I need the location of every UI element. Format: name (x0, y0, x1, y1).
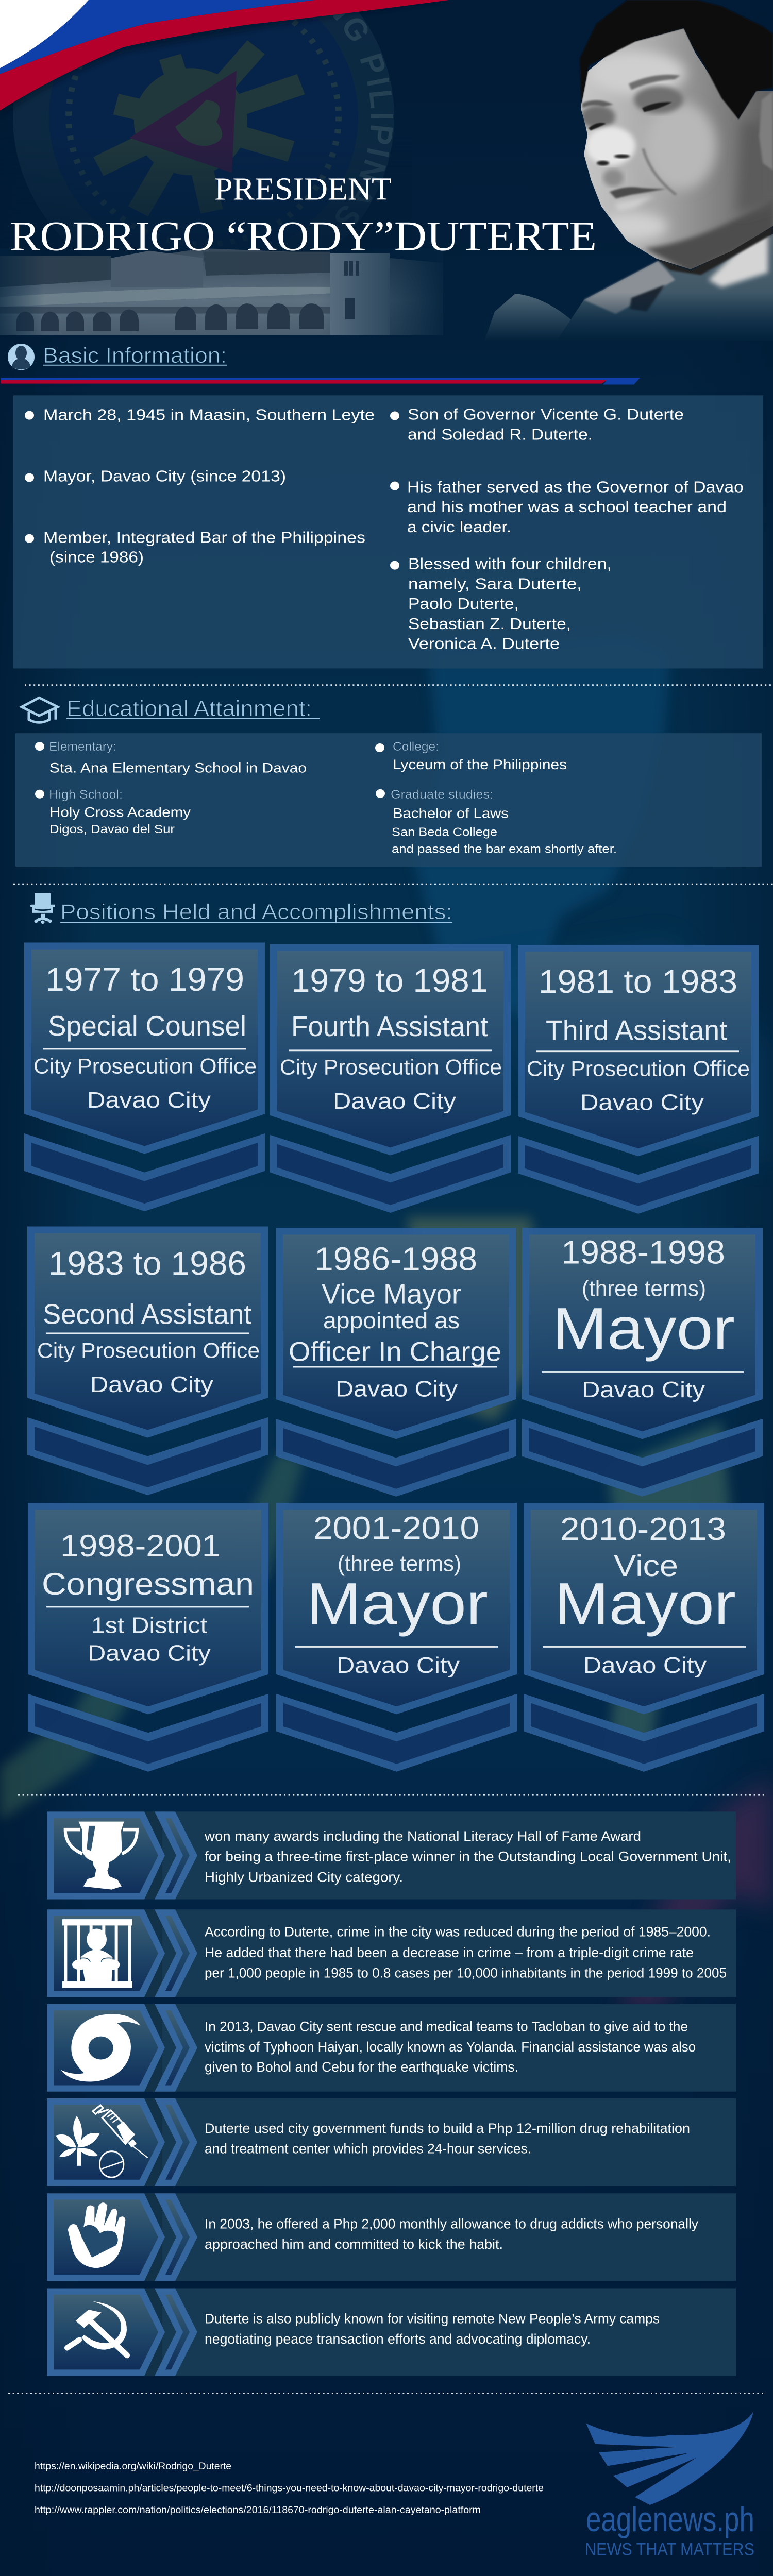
bullets: left column: March 28, 1945 in Maasin, Southern Leyte (43, 406, 375, 423)
row: peace negotiations: Duterte is also publicly known for visiting remote New People’s Army camps (205, 2311, 660, 2326)
shield: 1981 to 1983: 1981 to 1983 (539, 963, 737, 1000)
shield: 1977 to 1979: Special Counsel (48, 1010, 246, 1042)
icon: eagle wing (586, 2412, 753, 2505)
shield: 1998-2001: Congressman (42, 1567, 254, 1601)
shield: 1981 to 1983: Third Assistant (546, 1014, 727, 1046)
education: high school (35, 788, 191, 836)
shield: 1986-1988 (276, 1228, 516, 1497)
row: drug addict allowance: approached him and committed to kick the habit. (205, 2236, 503, 2252)
shield: 2010-2013: Davao City (583, 1653, 707, 1678)
shield: 1986-1988: 1986-1988 (314, 1241, 477, 1278)
bullets: left column: Mayor, Davao City (since 2013) (43, 467, 286, 485)
portrait: face (577, 24, 773, 273)
watermark: presidential seal (13, 12, 394, 233)
icon: office chair (30, 893, 55, 924)
portrait: mouth (610, 187, 666, 211)
shield: 1983 to 1986: Second Assistant (43, 1298, 251, 1330)
heading: Positions Held and Accomplishments: Positions Held and Accomplishments: (60, 900, 452, 924)
row: drug rehabilitation: and treatment center which provides 24-hour services. (205, 2141, 531, 2157)
heading: Basic Information: Basic Information: (43, 344, 227, 368)
flag swoosh (0, 0, 449, 117)
shield: 1979 to 1981: 1979 to 1981 (291, 962, 488, 999)
row: crime reduction: According to Duterte, crime in the city was reduced during the period of 1985–2000. (205, 1924, 711, 1939)
education: graduate studies: Graduate studies: (391, 788, 493, 802)
icon: graduation cap (22, 698, 58, 722)
icon: prisoner behind bars (62, 1919, 132, 1988)
shield: 1998-2001: 1st District (91, 1613, 208, 1638)
education: college: Lyceum of the Philippines (393, 757, 567, 772)
shield: 2001-2010: (three terms) (338, 1551, 461, 1576)
row: drug rehabilitation: Duterte used city government funds to build a Php 12-million drug rehabilitation (205, 2121, 690, 2136)
shield: 1977 to 1979: City Prosecution Office (33, 1055, 257, 1078)
bullets: right column (390, 405, 744, 652)
portrait: raised hand (484, 294, 582, 341)
shield: 1988-1998: Mayor (552, 1296, 735, 1362)
row: literacy award: won many awards including the National Literacy Hall of Fame Award (204, 1828, 641, 1844)
row: peace negotiations: negotiating peace transaction efforts and advocating diplomacy. (205, 2331, 591, 2347)
shield: 2001-2010: Davao City (337, 1653, 460, 1678)
source links: http://doonposaamin.ph/articles/people-to-meet/6-things-you-need-to-know-about-davao-city-mayor-rodrigo-duterte (35, 2483, 544, 2494)
shield: 1983 to 1986: Davao City (90, 1372, 214, 1397)
title line: PRESIDENT: PRESIDENT (214, 171, 392, 207)
bullets: right column: Blessed with four children, (408, 555, 612, 573)
bullets: right column: Son of Governor Vicente G. Duterte (408, 405, 684, 423)
logo: eaglenews.ph (585, 2412, 754, 2559)
bullets: left column: (since 1986) (49, 548, 144, 566)
education: elementary (35, 740, 307, 776)
education: college (375, 740, 567, 772)
portrait photo of Duterte (484, 0, 773, 341)
education: elementary: Sta. Ana Elementary School in Davao (49, 760, 307, 776)
heading: Positions Held and Accomplishments (30, 893, 452, 924)
row: typhoon aid: In 2013, Davao City sent rescue and medical teams to Tacloban to give aid to the (205, 2019, 688, 2034)
title line: name: RODRIGO “RODY”DUTERTE (10, 213, 597, 260)
shield: 1979 to 1981: Davao City (333, 1089, 457, 1113)
shield: 1986-1988: appointed as (323, 1308, 460, 1333)
title (10, 171, 597, 260)
panel: educational attainment (15, 733, 762, 867)
education: high school: Holy Cross Academy (49, 804, 191, 820)
panel: basic information (13, 395, 763, 668)
shield: 2010-2013: Mayor (554, 1571, 736, 1637)
portrait: nose (597, 155, 630, 165)
shield: 2010-2013: 2010-2013 (560, 1511, 726, 1547)
education: high school: High School: (49, 788, 123, 802)
portrait: shirt (557, 234, 773, 341)
education: graduate studies: Bachelor of Laws (393, 805, 509, 821)
bullets: right column: Paolo Duterte, (408, 595, 519, 613)
education: college: College: (393, 740, 439, 754)
shield: 1988-1998: Davao City (582, 1377, 705, 1402)
icon: hammer and sickle (67, 2301, 127, 2355)
education: graduate studies (376, 788, 617, 855)
shield: 1981 to 1983: Davao City (580, 1090, 704, 1115)
shield: 1986-1988: Officer In Charge (289, 1336, 501, 1367)
bullets: right column: Veronica A. Duterte (408, 635, 560, 652)
bullets: right column: and Soledad R. Duterte. (408, 426, 593, 443)
shield: 1981 to 1983 (518, 945, 759, 1214)
bullets: left column (25, 406, 375, 566)
shield: 2001-2010 (276, 1503, 517, 1772)
row: typhoon aid (47, 2004, 736, 2092)
shield: 1988-1998: 1988-1998 (561, 1234, 725, 1271)
education: graduate studies: San Beda College (392, 825, 497, 838)
bullets: right column: and his mother was a school teacher and (407, 498, 727, 516)
shield: 1986-1988: Vice Mayor (322, 1278, 461, 1310)
shield: 1979 to 1981: Fourth Assistant (291, 1010, 488, 1042)
shield: 2010-2013: Vice (614, 1549, 678, 1583)
row: typhoon aid: given to Bohol and Cebu for the earthquake victims. (205, 2059, 518, 2075)
bullets: right column: His father served as the Governor of Davao (407, 478, 744, 496)
portrait: ear (759, 91, 773, 171)
icon: trophy (65, 1822, 137, 1890)
education: high school: Digos, Davao del Sur (49, 822, 175, 836)
shield: 1983 to 1986: City Prosecution Office (37, 1339, 260, 1363)
icon: leaf, syringe and pill (56, 2105, 148, 2177)
shield: 1977 to 1979: 1977 to 1979 (45, 961, 244, 998)
heading: Educational Attainment: Educational Attainment: (66, 696, 312, 721)
shield: 1983 to 1986 (27, 1226, 268, 1495)
portrait: neck (656, 226, 773, 275)
shield: 1986-1988: Davao City (335, 1376, 458, 1401)
bullets: right column: a civic leader. (407, 518, 511, 536)
icon: hand with heart (68, 2202, 125, 2268)
shield: 1977 to 1979 (24, 943, 265, 1211)
shield: 2001-2010: 2001-2010 (313, 1510, 479, 1546)
shield: 2010-2013 (524, 1503, 764, 1772)
row: crime reduction: per 1,000 people in 1985 to 0.8 cases per 10,000 inhabitants in the period 1999 to 2005 (205, 1965, 727, 1980)
education: graduate studies: and passed the bar exam shortly after. (392, 842, 617, 855)
background photo: Malacanang building (0, 248, 443, 335)
shield: 1998-2001: 1998-2001 (60, 1529, 221, 1564)
row: drug addict allowance (47, 2193, 736, 2281)
education: elementary: Elementary: (49, 740, 116, 754)
source links (35, 2461, 544, 2516)
shield: 1998-2001: Davao City (88, 1641, 211, 1666)
portrait: eyes and brows (582, 75, 680, 130)
red and blue divider bar (1, 378, 640, 385)
row: literacy award: Highly Urbanized City category. (205, 1869, 403, 1885)
shield: 1977 to 1979: Davao City (87, 1088, 211, 1113)
source links: http://www.rappler.com/nation/politics/elections/2016/118670-rodrigo-duterte-alan-cayetano-platform (35, 2505, 481, 2516)
bullets: left column: Member, Integrated Bar of the Philippines (43, 529, 365, 546)
shield: 1988-1998 (522, 1228, 763, 1497)
row: drug rehabilitation (47, 2098, 736, 2186)
shield: 1981 to 1983: City Prosecution Office (527, 1057, 750, 1081)
shield: 1979 to 1981 (270, 944, 511, 1213)
row: crime reduction: He added that there had been a decrease in crime – from a triple-digit crime rate (205, 1945, 694, 1960)
row: drug addict allowance: In 2003, he offered a Php 2,000 monthly allowance to drug addicts who personally (205, 2216, 698, 2231)
row: peace negotiations (47, 2289, 736, 2376)
row: literacy award: for being a three-time first-place winner in the Outstanding Local Government Unit, (205, 1849, 731, 1865)
icon: person (8, 344, 34, 369)
portrait: hair (580, 0, 773, 120)
source links: https://en.wikipedia.org/wiki/Rodrigo_Duterte (35, 2461, 231, 2472)
shield: 1979 to 1981: City Prosecution Office (280, 1056, 502, 1079)
shield: 1998-2001 (28, 1503, 268, 1772)
shield: 1988-1998: (three terms) (582, 1276, 706, 1301)
row: typhoon aid: victims of Typhoon Haiyan, locally known as Yolanda. Financial assistance was also (205, 2039, 696, 2055)
shield: 2001-2010: Mayor (307, 1571, 488, 1637)
shield: 1983 to 1986: 1983 to 1986 (48, 1245, 246, 1282)
icon: typhoon (61, 2014, 141, 2082)
row: crime reduction (47, 1909, 736, 1997)
bullets: right column: namely, Sara Duterte, (408, 575, 582, 592)
row: literacy award (47, 1811, 736, 1899)
bullets: right column: Sebastian Z. Duterte, (408, 615, 571, 633)
